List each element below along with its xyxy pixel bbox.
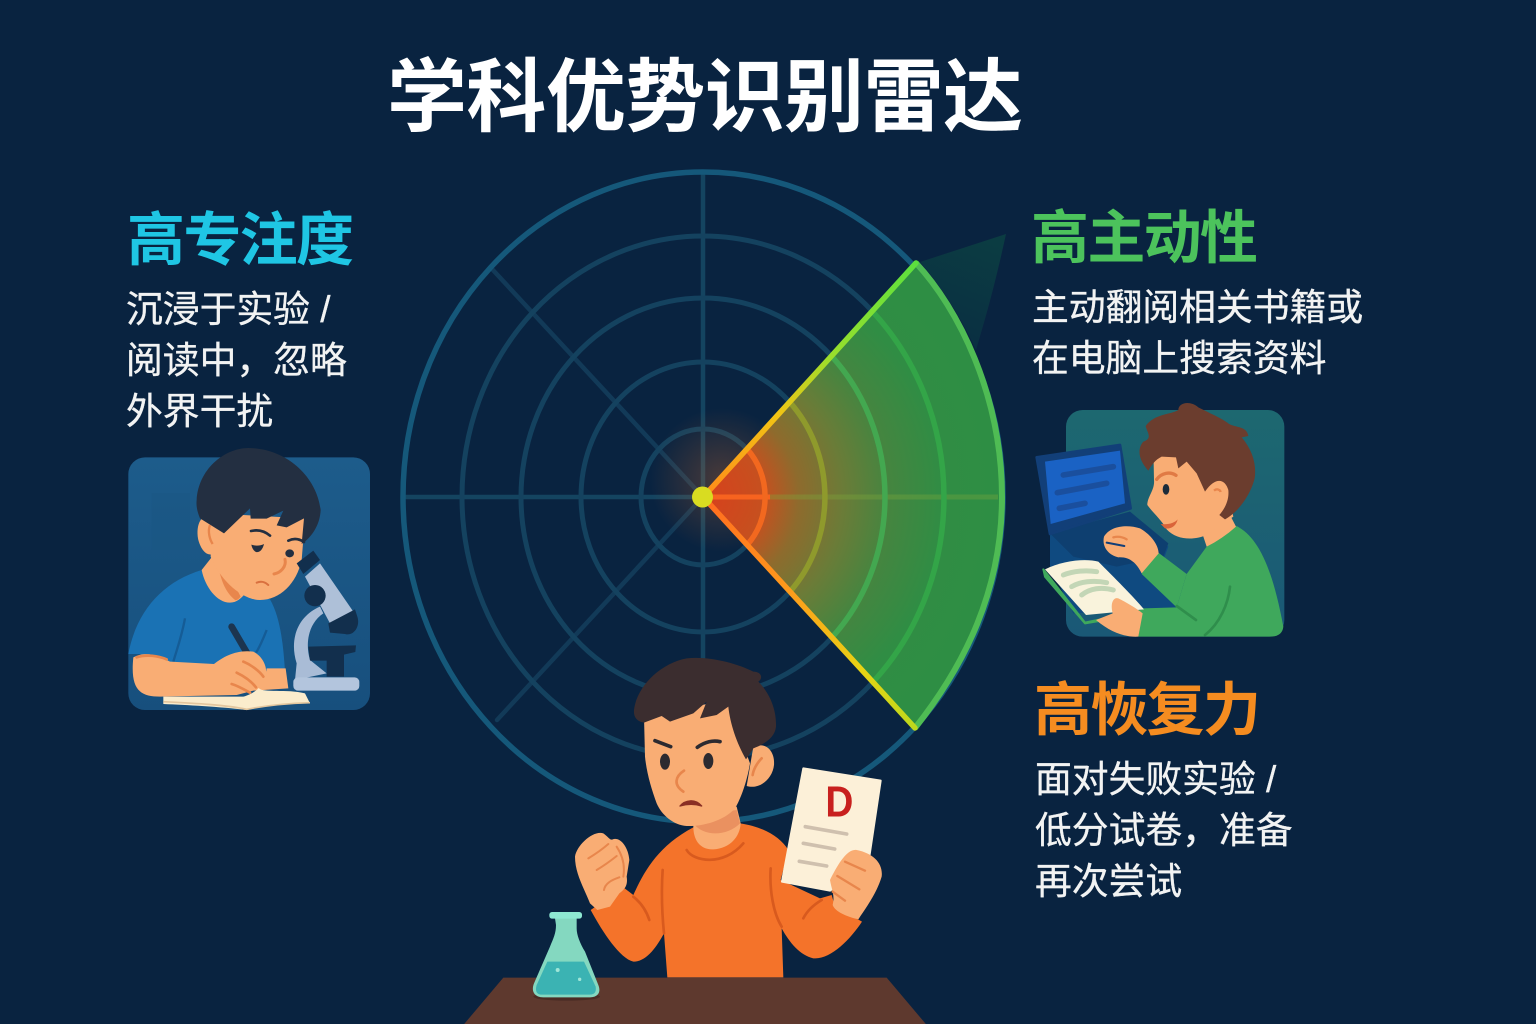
faint sweep shadow xyxy=(920,234,1006,350)
text block: high resilience: 再次尝试 xyxy=(1035,861,1182,902)
arm and hand xyxy=(133,651,288,697)
center glow xyxy=(650,408,794,552)
pencil xyxy=(232,627,267,687)
eye and brow xyxy=(1157,473,1176,495)
text block: high focus xyxy=(126,289,347,432)
panel: high resilience xyxy=(1034,678,1293,902)
face xyxy=(1147,440,1233,539)
shirt xyxy=(128,570,285,672)
left fist xyxy=(575,833,629,910)
illustration: boy with laptop and book xyxy=(1037,403,1284,637)
neck xyxy=(1200,515,1236,547)
text block: high resilience: 面对失败实验 / xyxy=(1035,759,1277,800)
right hand xyxy=(830,850,882,919)
open book xyxy=(1043,560,1145,623)
text block: high initiative: 主动翻阅相关书籍或 xyxy=(1032,287,1363,328)
ear xyxy=(197,516,220,554)
face xyxy=(644,700,750,826)
panel: high initiative xyxy=(1031,206,1363,637)
text block: high focus: 沉浸于实验 / xyxy=(126,289,331,330)
text block: high initiative: 在电脑上搜索资料 xyxy=(1032,338,1326,379)
laptop xyxy=(1037,445,1177,613)
heading: high focus: 高专注度 xyxy=(127,208,354,273)
neck xyxy=(202,547,247,603)
text block: high resilience: 低分试卷，准备 xyxy=(1035,810,1293,851)
sweater xyxy=(591,823,862,977)
face xyxy=(211,513,305,600)
card background xyxy=(1066,410,1284,637)
radar chart xyxy=(403,172,1006,822)
hand on laptop xyxy=(1104,526,1159,573)
table xyxy=(463,978,927,1024)
card background xyxy=(128,457,370,710)
title: 学科优势识别雷达 xyxy=(387,53,1023,142)
nose and mouth xyxy=(274,559,285,574)
radar center dot xyxy=(692,486,713,508)
eyes and brows xyxy=(251,530,304,557)
notebook xyxy=(163,688,310,710)
text block: high initiative xyxy=(1032,287,1363,379)
test paper with grade D xyxy=(782,768,881,891)
illustration: boy with failed test and flask xyxy=(463,658,927,1024)
radar grid xyxy=(403,172,1003,822)
text block: high focus: 阅读中，忽略 xyxy=(126,340,347,381)
microscope xyxy=(293,551,359,691)
hair xyxy=(634,658,776,759)
sweater xyxy=(1138,526,1283,637)
ear xyxy=(1204,481,1229,506)
nose xyxy=(677,771,684,792)
ear xyxy=(747,745,774,787)
eyes and brows xyxy=(655,741,720,770)
text block: high focus: 外界干扰 xyxy=(126,391,273,432)
hair xyxy=(196,448,321,544)
radar sector xyxy=(703,263,1002,728)
mouth xyxy=(1161,519,1178,529)
heading: high initiative: 高主动性 xyxy=(1031,206,1258,271)
mouth xyxy=(680,801,702,806)
neck xyxy=(693,807,741,849)
hand on book xyxy=(1096,598,1143,637)
panel: high focus xyxy=(126,208,370,710)
flask xyxy=(533,912,600,1001)
test paper with grade D: D xyxy=(825,778,853,827)
hair xyxy=(1139,403,1255,519)
text block: high resilience xyxy=(1035,759,1293,902)
heading: high resilience: 高恢复力 xyxy=(1034,678,1261,743)
illustration: boy with microscope xyxy=(128,448,370,710)
